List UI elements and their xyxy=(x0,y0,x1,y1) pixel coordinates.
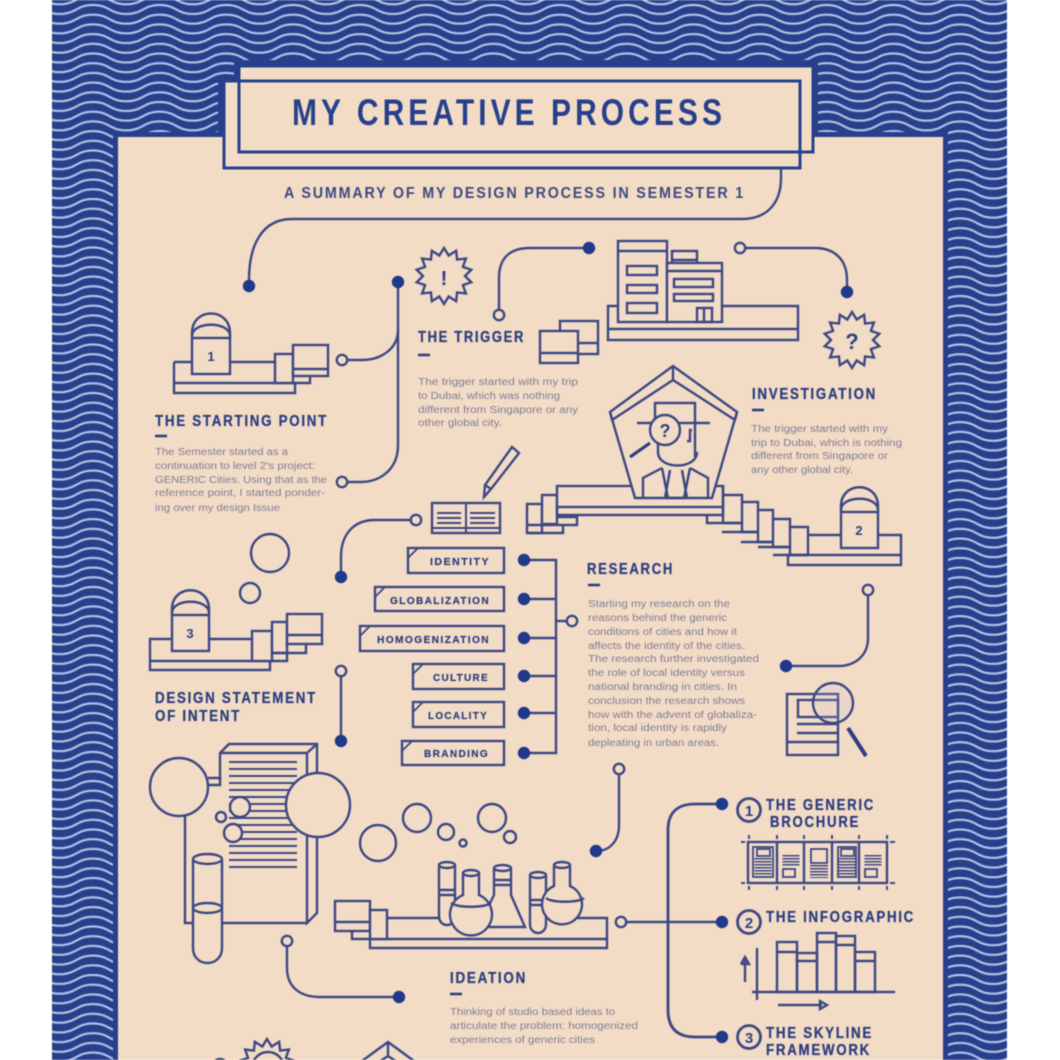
outcome heading: the skyline framework: FRAMEWORK xyxy=(766,1042,871,1059)
text block: research: conditions of cities and how it xyxy=(588,627,737,638)
tag: homogenization xyxy=(360,626,504,651)
icon: statement platform xyxy=(150,590,322,670)
icon: pencil xyxy=(484,447,519,497)
tag: globalization: GLOBALIZATION xyxy=(390,595,490,607)
tag: branding: BRANDING xyxy=(424,748,489,760)
heading: design statement of intent: DESIGN STATEMENT xyxy=(155,690,317,707)
icon: lab glassware on shelf xyxy=(335,862,607,948)
text block: research: how with the advent of globaliza- xyxy=(588,710,757,721)
text block: investigation: trip to Dubai, which is nothing xyxy=(751,438,902,449)
text block: the trigger: to Dubai, which was nothing xyxy=(418,391,560,402)
outcome heading: the skyline framework: 3 xyxy=(745,1030,753,1047)
connector: ideation to outcomes xyxy=(616,798,728,1043)
tag: homogenization: HOMOGENIZATION xyxy=(377,634,490,646)
outcome heading: the generic brochure xyxy=(738,797,875,831)
icon: starting point platform xyxy=(174,314,328,393)
text block: investigation xyxy=(751,386,902,476)
icon: question burst: ? xyxy=(845,329,859,354)
icon: open book xyxy=(432,503,500,533)
text block: the trigger: The trigger started with my trip xyxy=(418,377,579,388)
text block: research: RESEARCH xyxy=(587,561,674,578)
icon: exclamation burst: ! xyxy=(441,268,447,290)
outcome heading: the infographic: THE INFOGRAPHIC xyxy=(766,909,915,926)
icon: cards xyxy=(540,321,598,363)
icon: brochure xyxy=(741,835,895,890)
text block: the trigger: THE TRIGGER xyxy=(418,329,525,346)
icon: staircase stage xyxy=(527,486,901,565)
text block: research: depleating in urban areas. xyxy=(588,738,719,749)
text block: ideation: experiences of generic cities xyxy=(450,1035,595,1046)
text block: the starting point: THE STARTING POINT xyxy=(155,413,328,430)
tag: identity: IDENTITY xyxy=(430,556,490,568)
icon: statement platform: 3 xyxy=(186,626,194,641)
tag: branding xyxy=(402,741,504,765)
outcome heading: the generic brochure: THE GENERIC xyxy=(766,797,875,814)
icon: starting point platform: 1 xyxy=(207,349,215,364)
tag: culture: CULTURE xyxy=(433,672,489,684)
icon: thought bubbles xyxy=(240,534,289,603)
title frame xyxy=(224,66,813,168)
bar chart xyxy=(741,933,895,1009)
tag: globalization xyxy=(375,587,504,611)
icon: cropped burst at bottom xyxy=(213,1039,294,1060)
text block: investigation: The trigger started with my xyxy=(751,424,888,435)
connector: statement to tags xyxy=(335,666,347,747)
panel: cream content area xyxy=(113,60,948,1060)
outcome heading: the skyline framework xyxy=(738,1025,873,1059)
text block: investigation: INVESTIGATION xyxy=(752,386,877,403)
text block: investigation: any other global city. xyxy=(751,465,853,476)
text block: the starting point: GENERIC Cities. Using that as the xyxy=(155,475,327,486)
text block: ideation: articulate the problem: homogenized xyxy=(450,1021,638,1032)
connector: document to ideation xyxy=(282,936,405,1003)
icon: document with lenses and test tube xyxy=(150,744,350,963)
text block: the trigger xyxy=(418,329,579,429)
icon: staircase stage: 2 xyxy=(855,523,863,538)
text block: the starting point: The Semester started as a xyxy=(155,447,288,458)
text block: research: reasons behind the generic xyxy=(588,613,727,624)
text block: ideation: Thinking of studio based ideas to xyxy=(450,1007,615,1018)
text block: research: affects the identity of the cities. xyxy=(588,641,745,652)
text block: the starting point: reference point, I started ponder- xyxy=(155,488,325,499)
outcome heading: the infographic xyxy=(738,909,915,934)
title: MY CREATIVE PROCESS xyxy=(292,92,726,133)
text block: research xyxy=(587,561,759,749)
text block: investigation: different from Singapore or xyxy=(751,451,889,462)
text block: the trigger: different from Singapore or any xyxy=(418,405,578,416)
icon: cropped house at bottom xyxy=(325,1042,451,1060)
tag: identity xyxy=(408,548,504,573)
text block: ideation: IDEATION xyxy=(450,970,527,987)
text block: research: Starting my research on the xyxy=(588,599,730,610)
connector: trigger to city xyxy=(494,242,595,320)
connector: tags bracket to research xyxy=(518,554,577,759)
text block: research: tion, local identity is rapidly xyxy=(588,723,727,734)
icon: detective in house: ? xyxy=(660,421,670,441)
outcome heading: the generic brochure: 1 xyxy=(745,803,753,820)
connector: title to starting point xyxy=(243,169,781,292)
connector: city to investigation xyxy=(735,243,853,298)
connector: magnifier to lab xyxy=(590,764,624,857)
icon: bubbles above lab xyxy=(360,804,516,861)
tag: locality xyxy=(413,702,504,727)
outcome heading: the generic brochure: BROCHURE xyxy=(770,814,860,831)
subtitle: A SUMMARY OF MY DESIGN PROCESS IN SEMESTER 1 xyxy=(284,185,745,202)
text block: research: national branding in cities. In xyxy=(588,682,737,693)
text block: the starting point: ing over my design Issue xyxy=(155,503,280,514)
icon: detective in house xyxy=(610,366,737,498)
text block: ideation xyxy=(450,970,638,1046)
tag: culture xyxy=(413,664,504,689)
text block: research: the role of local identity versus xyxy=(588,668,745,679)
text block: the starting point xyxy=(155,413,328,514)
heading: design statement of intent xyxy=(155,690,317,725)
text block: the trigger: other global city. xyxy=(418,418,502,429)
text block: research: The research further investigated xyxy=(588,654,759,665)
tag: locality: LOCALITY xyxy=(428,710,488,722)
outcome heading: the infographic: 2 xyxy=(745,915,753,932)
text block: research: conclusion the research shows xyxy=(588,696,745,707)
connector: research to magnifier xyxy=(780,585,873,672)
outcome heading: the skyline framework: THE SKYLINE xyxy=(766,1025,873,1042)
text block: the starting point: continuation to level 2's project: xyxy=(155,461,315,472)
icon: question burst xyxy=(825,312,879,368)
heading: design statement of intent: OF INTENT xyxy=(155,708,241,725)
icon: document with magnifier xyxy=(787,683,866,756)
connector: starting point to trigger xyxy=(337,276,404,487)
icon: city buildings xyxy=(608,241,798,340)
connector: book to statement xyxy=(335,515,421,583)
icon: exclamation burst xyxy=(417,248,471,304)
